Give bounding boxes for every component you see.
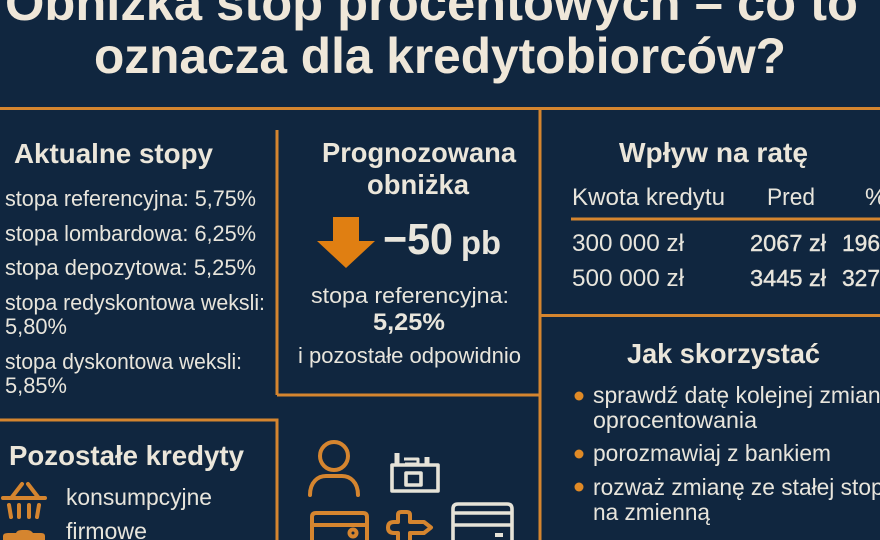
value: -50 pb: pb [461,224,501,261]
icon: battery [392,453,438,491]
note: new reference rate: i pozostałe odpowidnio [298,343,521,368]
table header: Kwota kredytu [572,184,725,211]
table rows [572,230,880,292]
bullet list: oprocentowania [593,407,757,433]
panel: jak skorzystać [574,338,880,525]
heading: aktualne stopy: Aktualne stopy [14,138,213,169]
bullet list [574,382,880,525]
heading: jak skorzystać: Jak skorzystać [627,338,820,369]
bullet list: porozmawiaj z bankiem [593,440,831,466]
note: new reference rate [298,283,521,368]
icon: card [453,504,512,540]
table header [571,184,880,219]
bullet list: na zmienną [593,499,710,525]
panel: prognozowana obniżka [298,137,521,368]
table header: Pred [767,184,815,211]
list of current rates: 5,85% [5,373,67,398]
table rows: 196 [842,230,880,256]
list of current rates: 5,80% [5,314,67,339]
panel: icons [310,442,512,540]
icon: basket [3,484,45,517]
icon: wallet [312,513,367,540]
title [5,0,858,84]
note: new reference rate: 5,25% [373,309,445,336]
note: new reference rate: stopa referencyjna: [311,283,509,308]
icon: down arrow [317,217,375,268]
list of current rates: stopa depozytowa: 5,25% [5,255,256,280]
list of current rates: stopa dyskontowa weksli: [5,349,242,374]
title: oznacza dla kredytobiorców? [94,28,786,84]
table rows: 327 [842,265,880,291]
table rows: 500 000 zł [572,265,685,292]
label: konsumpcyjne: konsumpcyjne [66,484,212,510]
table rows: 300 000 zł [572,230,685,257]
value: -50 pb: −50 [383,215,453,264]
icon: person [310,442,358,495]
icon: briefcase [3,530,45,540]
heading: prognozowana obniżka [322,137,516,200]
heading: wpływ na ratę: Wpływ na ratę [619,137,808,168]
list of current rates: stopa referencyjna: 5,75% [5,186,256,211]
table rows: 2067 zł [750,230,826,256]
value: -50 pb [383,215,501,264]
heading: prognozowana obniżka: obniżka [367,169,469,200]
panel: aktualne stopy [5,138,265,398]
heading: pozostałe kredyty: Pozostałe kredyty [9,440,244,471]
panel: pozostałe kredyty [3,440,244,540]
list of current rates: stopa lombardowa: 6,25% [5,221,256,246]
list of current rates: stopa redyskontowa weksli: [5,290,265,315]
table rows: 3445 zł [750,265,826,291]
panel: wpływ na ratę [571,137,880,292]
list of current rates [5,186,265,398]
heading: prognozowana obniżka: Prognozowana [322,137,516,168]
icon: signpost cross [388,512,431,540]
